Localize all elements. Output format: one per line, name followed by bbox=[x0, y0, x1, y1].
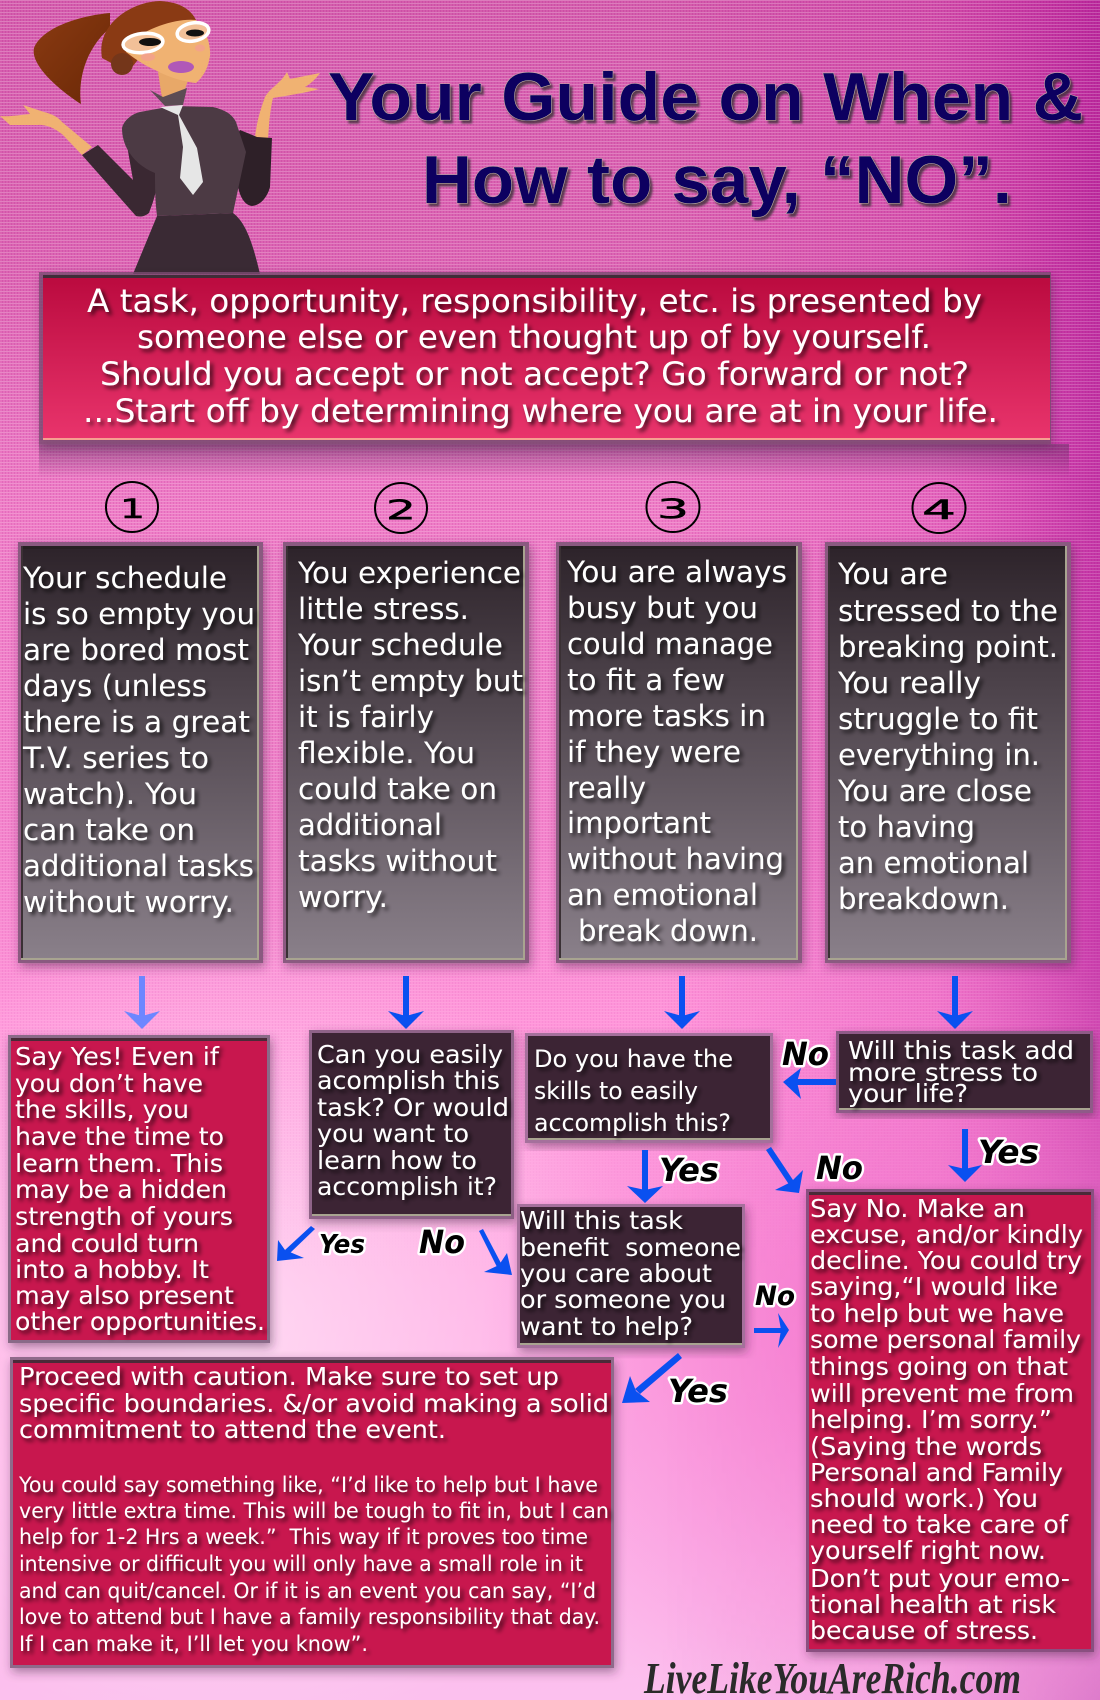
step 1 text: can take on bbox=[23, 813, 195, 847]
label: no: No bbox=[755, 1281, 795, 1312]
say no text: to help but we have bbox=[810, 1299, 1064, 1328]
say no text: some personal family bbox=[810, 1325, 1081, 1354]
will this task benefit text: want to help? bbox=[520, 1312, 693, 1341]
proceed example text: If I can make it, I’ll let you know”. bbox=[19, 1632, 368, 1656]
title: Your Guide on When & bbox=[328, 59, 1083, 135]
say no text: excuse, and/or kindly bbox=[810, 1220, 1083, 1249]
step 4 text: struggle to fit bbox=[838, 702, 1038, 736]
step 3 text: break down. bbox=[578, 914, 758, 948]
say yes text bbox=[15, 1042, 265, 1336]
arrow: no diagonal to say no bbox=[766, 1147, 803, 1193]
can you easily text: task? Or would bbox=[317, 1093, 509, 1122]
say no text: helping. I’m sorry.” bbox=[810, 1405, 1052, 1434]
will this task add stress text: Will this task add bbox=[848, 1036, 1074, 1065]
number 2: 2 bbox=[386, 495, 416, 526]
arrow: yes diagonal to say yes bbox=[277, 1226, 315, 1261]
say no text: Don’t put your emo- bbox=[810, 1564, 1070, 1593]
label: yes: Yes bbox=[668, 1372, 728, 1410]
panel: say yes bbox=[8, 1035, 270, 1343]
label: no: No bbox=[782, 1035, 829, 1073]
label: no: No bbox=[419, 1223, 465, 1261]
step 4 text: You are bbox=[837, 557, 948, 591]
say yes text: strength of yours bbox=[15, 1202, 233, 1231]
step 4 text: You really bbox=[837, 666, 981, 700]
say no text: should work.) You bbox=[810, 1484, 1038, 1513]
panel: will this task add stress bbox=[836, 1031, 1093, 1113]
say yes text: have the time to bbox=[15, 1122, 224, 1151]
will this task add stress text: your life? bbox=[848, 1079, 968, 1108]
arrow: no diagonal to benefit question bbox=[479, 1229, 512, 1275]
panel: can you easily bbox=[309, 1030, 514, 1219]
will this task benefit text: Will this task bbox=[520, 1206, 684, 1235]
collar bbox=[150, 88, 187, 106]
can you easily text bbox=[317, 1040, 509, 1201]
will this task benefit text: benefit someone bbox=[520, 1233, 741, 1262]
say yes text: and could turn bbox=[15, 1229, 199, 1258]
step 4 text bbox=[837, 557, 1058, 916]
step 4 text: breaking point. bbox=[838, 630, 1058, 664]
step 3 text: busy but you bbox=[567, 591, 758, 625]
label: yes: Yes bbox=[978, 1133, 1039, 1171]
say no text: yourself right now. bbox=[810, 1536, 1046, 1565]
face bbox=[125, 20, 210, 83]
say no text: (Saying the words bbox=[810, 1432, 1042, 1461]
step 4 text: an emotional bbox=[838, 846, 1029, 880]
neck bbox=[158, 72, 188, 105]
say yes text: Say Yes! Even if bbox=[15, 1042, 220, 1071]
do you have the skills text: Do you have the bbox=[534, 1045, 733, 1073]
arrow: no right to say no bbox=[754, 1313, 789, 1348]
can you easily text: you want to bbox=[317, 1119, 469, 1148]
do you have the skills text bbox=[534, 1045, 733, 1137]
arrow: step 2 down bbox=[388, 976, 424, 1029]
say no text: things going on that bbox=[810, 1352, 1068, 1381]
arrow: yes diagonal to proceed bbox=[622, 1353, 682, 1403]
ponytail bbox=[34, 13, 110, 104]
arrow: yes down to say no bbox=[948, 1129, 982, 1182]
panel: do you have the skills bbox=[525, 1033, 773, 1143]
will this task benefit text: you care about bbox=[520, 1259, 712, 1288]
step 2 text: could take on bbox=[298, 772, 497, 806]
step 1 text: additional tasks bbox=[23, 849, 254, 883]
panel: step 4 bbox=[825, 542, 1071, 963]
label: no: No bbox=[816, 1149, 863, 1187]
arrow: step 4 down bbox=[937, 976, 973, 1029]
proceed example text bbox=[18, 1473, 609, 1656]
intro text: A task, opportunity, responsibility, etc. is presented by bbox=[87, 282, 982, 320]
lips bbox=[168, 61, 194, 73]
number 2 bbox=[375, 483, 427, 533]
arrow: step 1 down bbox=[124, 976, 160, 1029]
step 1 text: T.V. series to bbox=[22, 741, 209, 775]
panel: say no bbox=[806, 1189, 1094, 1652]
can you easily text: learn how to bbox=[317, 1146, 477, 1175]
will this task benefit text: or someone you bbox=[520, 1285, 726, 1314]
say no text: saying,“I would like bbox=[810, 1272, 1058, 1301]
proceed heading text: specific boundaries. &/or avoid making a solid bbox=[19, 1389, 609, 1418]
say no text: decline. You could try bbox=[810, 1246, 1082, 1275]
number 1: 1 bbox=[120, 494, 145, 525]
proceed example text: intensive or difficult you will only have a small role in it bbox=[19, 1552, 583, 1576]
step 2 text: You experience bbox=[297, 556, 521, 590]
say no text bbox=[810, 1194, 1083, 1645]
do you have the skills text: accomplish this? bbox=[534, 1109, 731, 1137]
step 2 text: flexible. You bbox=[298, 736, 475, 770]
step 1 text: are bored most bbox=[23, 633, 249, 667]
right sleeve bbox=[228, 130, 272, 206]
tie bbox=[160, 105, 203, 195]
step 3 text: really bbox=[567, 771, 646, 805]
eyes bbox=[139, 30, 204, 46]
intro text: ...Start off by determining where you are at in your life. bbox=[83, 392, 998, 430]
say no text: Say No. Make an bbox=[810, 1194, 1025, 1223]
panel: proceed with caution bbox=[10, 1357, 614, 1668]
number 3: 3 bbox=[657, 494, 689, 525]
say yes text: other opportunities. bbox=[15, 1307, 265, 1336]
panel: step 3 bbox=[556, 542, 802, 963]
say yes text: the skills, you bbox=[15, 1095, 189, 1124]
step 1 text: without worry. bbox=[23, 885, 234, 919]
number 4: 4 bbox=[922, 495, 956, 526]
left arm skin bbox=[0, 105, 92, 155]
hair bun at ear bbox=[111, 53, 133, 75]
step 2 text: tasks without bbox=[298, 844, 497, 878]
step 3 text: without having bbox=[567, 842, 784, 876]
proceed heading text bbox=[19, 1362, 609, 1444]
step 1 text: days (unless bbox=[23, 669, 207, 703]
arrow: step 3 down bbox=[664, 976, 700, 1029]
panel: will this task benefit bbox=[517, 1204, 745, 1348]
can you easily text: Can you easily bbox=[317, 1040, 503, 1069]
panel: intro banner bbox=[39, 272, 1051, 444]
intro text: someone else or even thought up of by yourself. bbox=[137, 318, 931, 356]
say no text: will prevent me from bbox=[810, 1379, 1074, 1408]
step 3 text: to fit a few bbox=[567, 663, 725, 697]
step 3 text: You are always bbox=[566, 555, 787, 589]
step 3 text: could manage bbox=[567, 627, 773, 661]
number 3 bbox=[646, 482, 700, 532]
arrow: no to do-you-have-skills bbox=[783, 1068, 836, 1099]
right arm skin bbox=[255, 72, 320, 138]
proceed heading text: commitment to attend the event. bbox=[19, 1415, 446, 1444]
say no text: need to take care of bbox=[810, 1510, 1069, 1539]
proceed example text: love to attend but I have a family responsibility that day. bbox=[19, 1605, 600, 1629]
panel: step 1 bbox=[18, 542, 263, 963]
will this task add stress text: more stress to bbox=[848, 1058, 1038, 1087]
say yes text: learn them. This bbox=[15, 1149, 223, 1178]
title: How to say, “NO”. bbox=[422, 142, 1012, 218]
panel: step 2 bbox=[283, 542, 529, 963]
step 1 text: watch). You bbox=[23, 777, 197, 811]
illustration: woman shrugging bbox=[0, 1, 320, 274]
say yes text: you don’t have bbox=[15, 1069, 203, 1098]
hair on head bbox=[101, 1, 196, 72]
step 4 text: stressed to the bbox=[838, 594, 1058, 628]
step 3 text: if they were bbox=[567, 735, 741, 769]
step 2 text: isn’t empty but bbox=[298, 664, 523, 698]
say no text: because of stress. bbox=[810, 1616, 1038, 1645]
intro text: Should you accept or not accept? Go forward or not? bbox=[100, 355, 969, 393]
intro text bbox=[83, 282, 998, 430]
will this task add stress text bbox=[848, 1036, 1074, 1108]
step 3 text: important bbox=[567, 806, 711, 840]
step 2 text bbox=[297, 556, 523, 914]
proceed heading text: Proceed with caution. Make sure to set up bbox=[19, 1362, 559, 1391]
step 4 text: to having bbox=[838, 810, 975, 844]
step 3 text: an emotional bbox=[567, 878, 758, 912]
proceed example text: and can quit/cancel. Or if it is an event you can say, “I’d bbox=[19, 1579, 596, 1603]
step 1 text: there is a great bbox=[23, 705, 250, 739]
proceed example text: very little extra time. This will be tough to fit in, but I can bbox=[19, 1499, 609, 1523]
step 4 text: breakdown. bbox=[838, 882, 1009, 916]
arrow: yes down to benefit question bbox=[627, 1150, 663, 1203]
proceed example text: You could say something like, “I’d like to help but I have bbox=[18, 1473, 598, 1497]
proceed example text: help for 1-2 Hrs a week.” This way if it proves too time bbox=[19, 1525, 588, 1549]
step 1 text bbox=[22, 561, 255, 919]
step 1 text: is so empty you bbox=[23, 597, 255, 631]
step 3 text: more tasks in bbox=[567, 699, 766, 733]
number 4 bbox=[912, 483, 966, 533]
skirt bbox=[133, 213, 260, 274]
step 2 text: little stress. bbox=[298, 592, 469, 626]
title bbox=[328, 59, 1083, 218]
say no text: tional health at risk bbox=[810, 1590, 1057, 1619]
say yes text: may be a hidden bbox=[15, 1175, 227, 1204]
number 1 bbox=[106, 482, 158, 532]
cheeks bbox=[141, 44, 205, 61]
say yes text: may also present bbox=[15, 1281, 234, 1310]
do you have the skills text: skills to easily bbox=[534, 1077, 698, 1105]
glasses bbox=[122, 20, 210, 55]
say yes text: into a hobby. It bbox=[15, 1255, 209, 1284]
step 2 text: worry. bbox=[298, 880, 388, 914]
step 2 text: it is fairly bbox=[298, 700, 434, 734]
left sleeve bbox=[82, 128, 158, 217]
torso bbox=[122, 106, 246, 216]
can you easily text: acomplish this bbox=[317, 1066, 500, 1095]
label: yes: Yes bbox=[659, 1151, 719, 1189]
say no text: Personal and Family bbox=[810, 1458, 1063, 1487]
will this task benefit text bbox=[520, 1206, 741, 1341]
step 2 text: additional bbox=[298, 808, 442, 842]
step 1 text: Your schedule bbox=[22, 561, 227, 595]
can you easily text: accomplish it? bbox=[317, 1172, 497, 1201]
step 3 text bbox=[566, 555, 787, 948]
step 4 text: everything in. bbox=[838, 738, 1040, 772]
step 2 text: Your schedule bbox=[297, 628, 503, 662]
step 4 text: You are close bbox=[837, 774, 1032, 808]
label: yes: Yes bbox=[319, 1230, 365, 1260]
